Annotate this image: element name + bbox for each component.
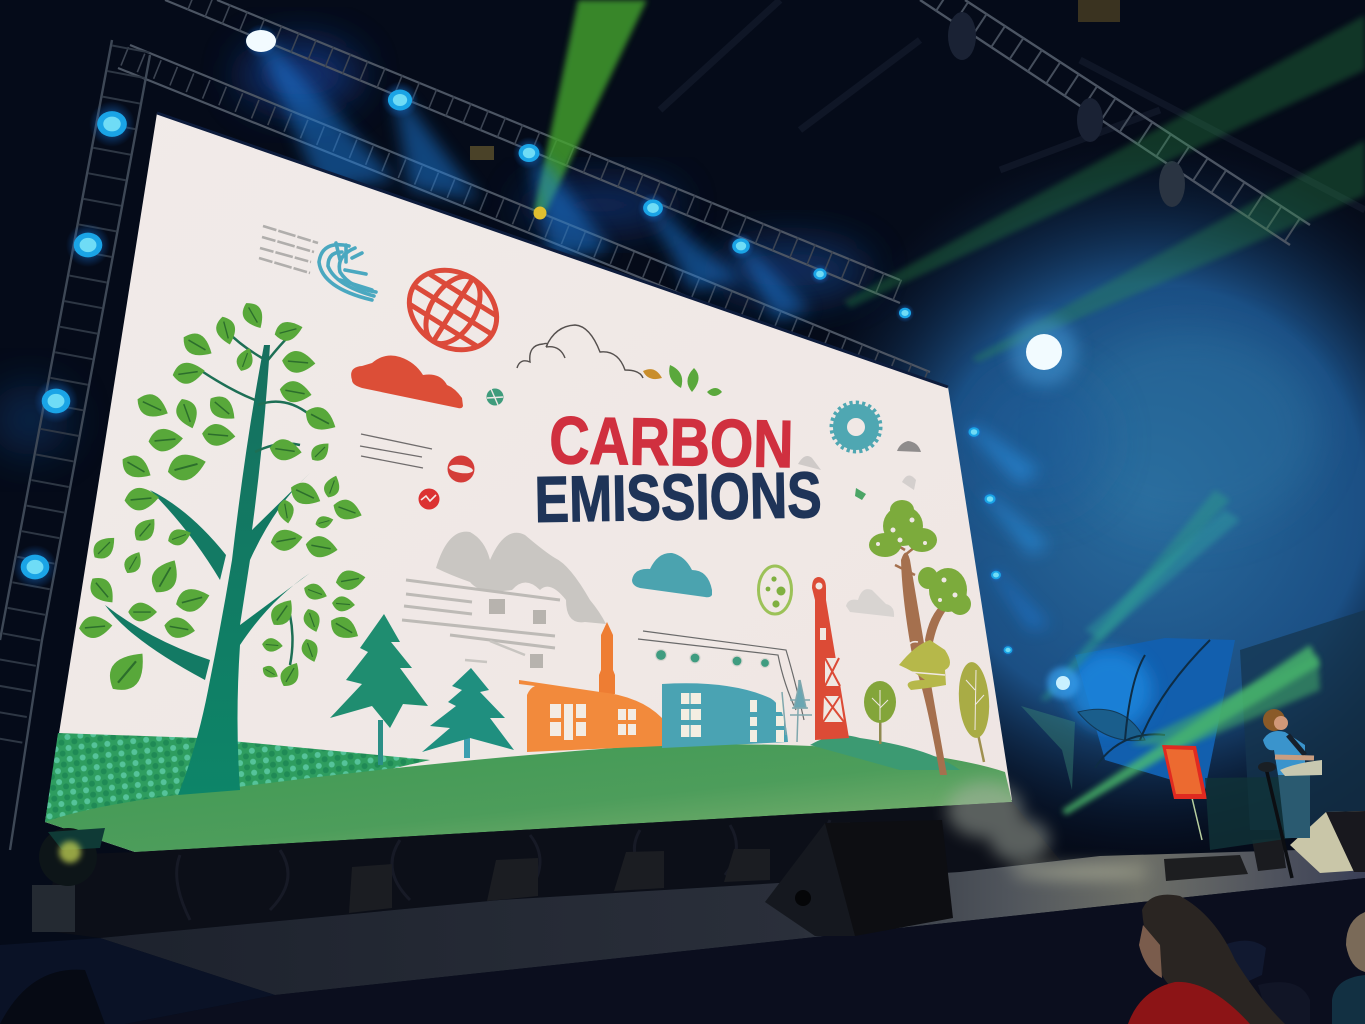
smoke plume <box>436 532 606 624</box>
red ball <box>448 456 474 482</box>
stage right riser <box>1205 777 1292 850</box>
orange factory <box>519 622 662 752</box>
small grey clouds <box>798 441 921 500</box>
red lattice tower <box>812 577 849 740</box>
rear video screen with leaf art <box>1068 610 1365 830</box>
teal rise behind hill <box>810 735 960 770</box>
stage floor <box>100 848 1365 995</box>
small monitors <box>349 849 770 913</box>
stage left side <box>0 938 275 1024</box>
upper roof beams <box>660 0 1365 210</box>
title <box>534 403 822 536</box>
text lines left <box>360 434 432 468</box>
truss structures <box>0 0 1310 850</box>
red ball small <box>418 488 440 510</box>
left truss tower <box>0 40 150 850</box>
icon: red globe <box>394 254 512 366</box>
tree leaves <box>78 298 367 698</box>
smoke near screen corner <box>947 782 1150 879</box>
icon: green petri circle <box>758 566 792 614</box>
mic stand <box>1266 768 1292 878</box>
hair <box>1142 895 1285 1024</box>
red cloud <box>351 355 463 408</box>
dashed pipe lines <box>638 631 804 720</box>
face <box>1139 925 1162 978</box>
screen panel <box>45 113 1012 852</box>
stage lights row <box>13 24 1079 699</box>
small round tree <box>864 681 896 744</box>
performer head <box>1263 709 1285 731</box>
icon: teal gear <box>833 404 879 450</box>
teal cloud <box>632 553 712 597</box>
small leaves group <box>643 365 722 396</box>
pine tree small <box>422 668 514 758</box>
pylon <box>782 680 812 742</box>
stage monitor speakers <box>349 811 1365 936</box>
second audience head <box>1346 912 1365 972</box>
teal building <box>662 680 812 748</box>
screen dark upper border <box>157 113 948 387</box>
title line: CARBON: CARBON <box>549 403 794 482</box>
large wedge speaker <box>765 820 953 936</box>
tall right tree <box>869 500 971 775</box>
stage front skirt <box>125 878 1365 1024</box>
right wedge speaker <box>1290 811 1365 873</box>
seats <box>1224 941 1266 985</box>
performer torso <box>1263 731 1305 775</box>
right floor monitor <box>1164 855 1248 881</box>
overhead truss top <box>165 0 900 303</box>
pine tree large <box>330 614 428 765</box>
red shirt <box>1128 982 1250 1024</box>
hanging fixtures <box>470 0 1185 207</box>
curtain folds <box>177 820 840 920</box>
moving head fixture left <box>32 828 105 932</box>
outline cloud <box>517 325 643 378</box>
icon: blue wave globe <box>319 243 376 300</box>
hill <box>45 744 1012 852</box>
LED screen <box>45 113 1012 852</box>
red sign on stand <box>1162 745 1207 840</box>
black curtain under screen <box>40 802 1060 938</box>
textured meadow <box>45 733 430 822</box>
slim right tree <box>956 661 992 762</box>
large tree <box>78 298 367 795</box>
performer <box>1258 709 1322 878</box>
grey cloud right <box>846 589 894 617</box>
tree trunk and branches <box>178 345 310 795</box>
performer guitar <box>1280 760 1322 776</box>
title line: EMISSIONS: EMISSIONS <box>534 458 822 536</box>
right truss <box>920 0 1310 245</box>
audience shadow bottom left <box>0 970 105 1024</box>
performer legs <box>1278 775 1310 838</box>
green light beams <box>534 0 1365 815</box>
blue spot light cones <box>258 42 1050 630</box>
audience member <box>1128 895 1365 1024</box>
small teal ball <box>486 388 504 406</box>
overhead truss lower <box>118 45 930 392</box>
faded factory diagram <box>402 580 560 668</box>
document lines top left <box>259 226 318 273</box>
